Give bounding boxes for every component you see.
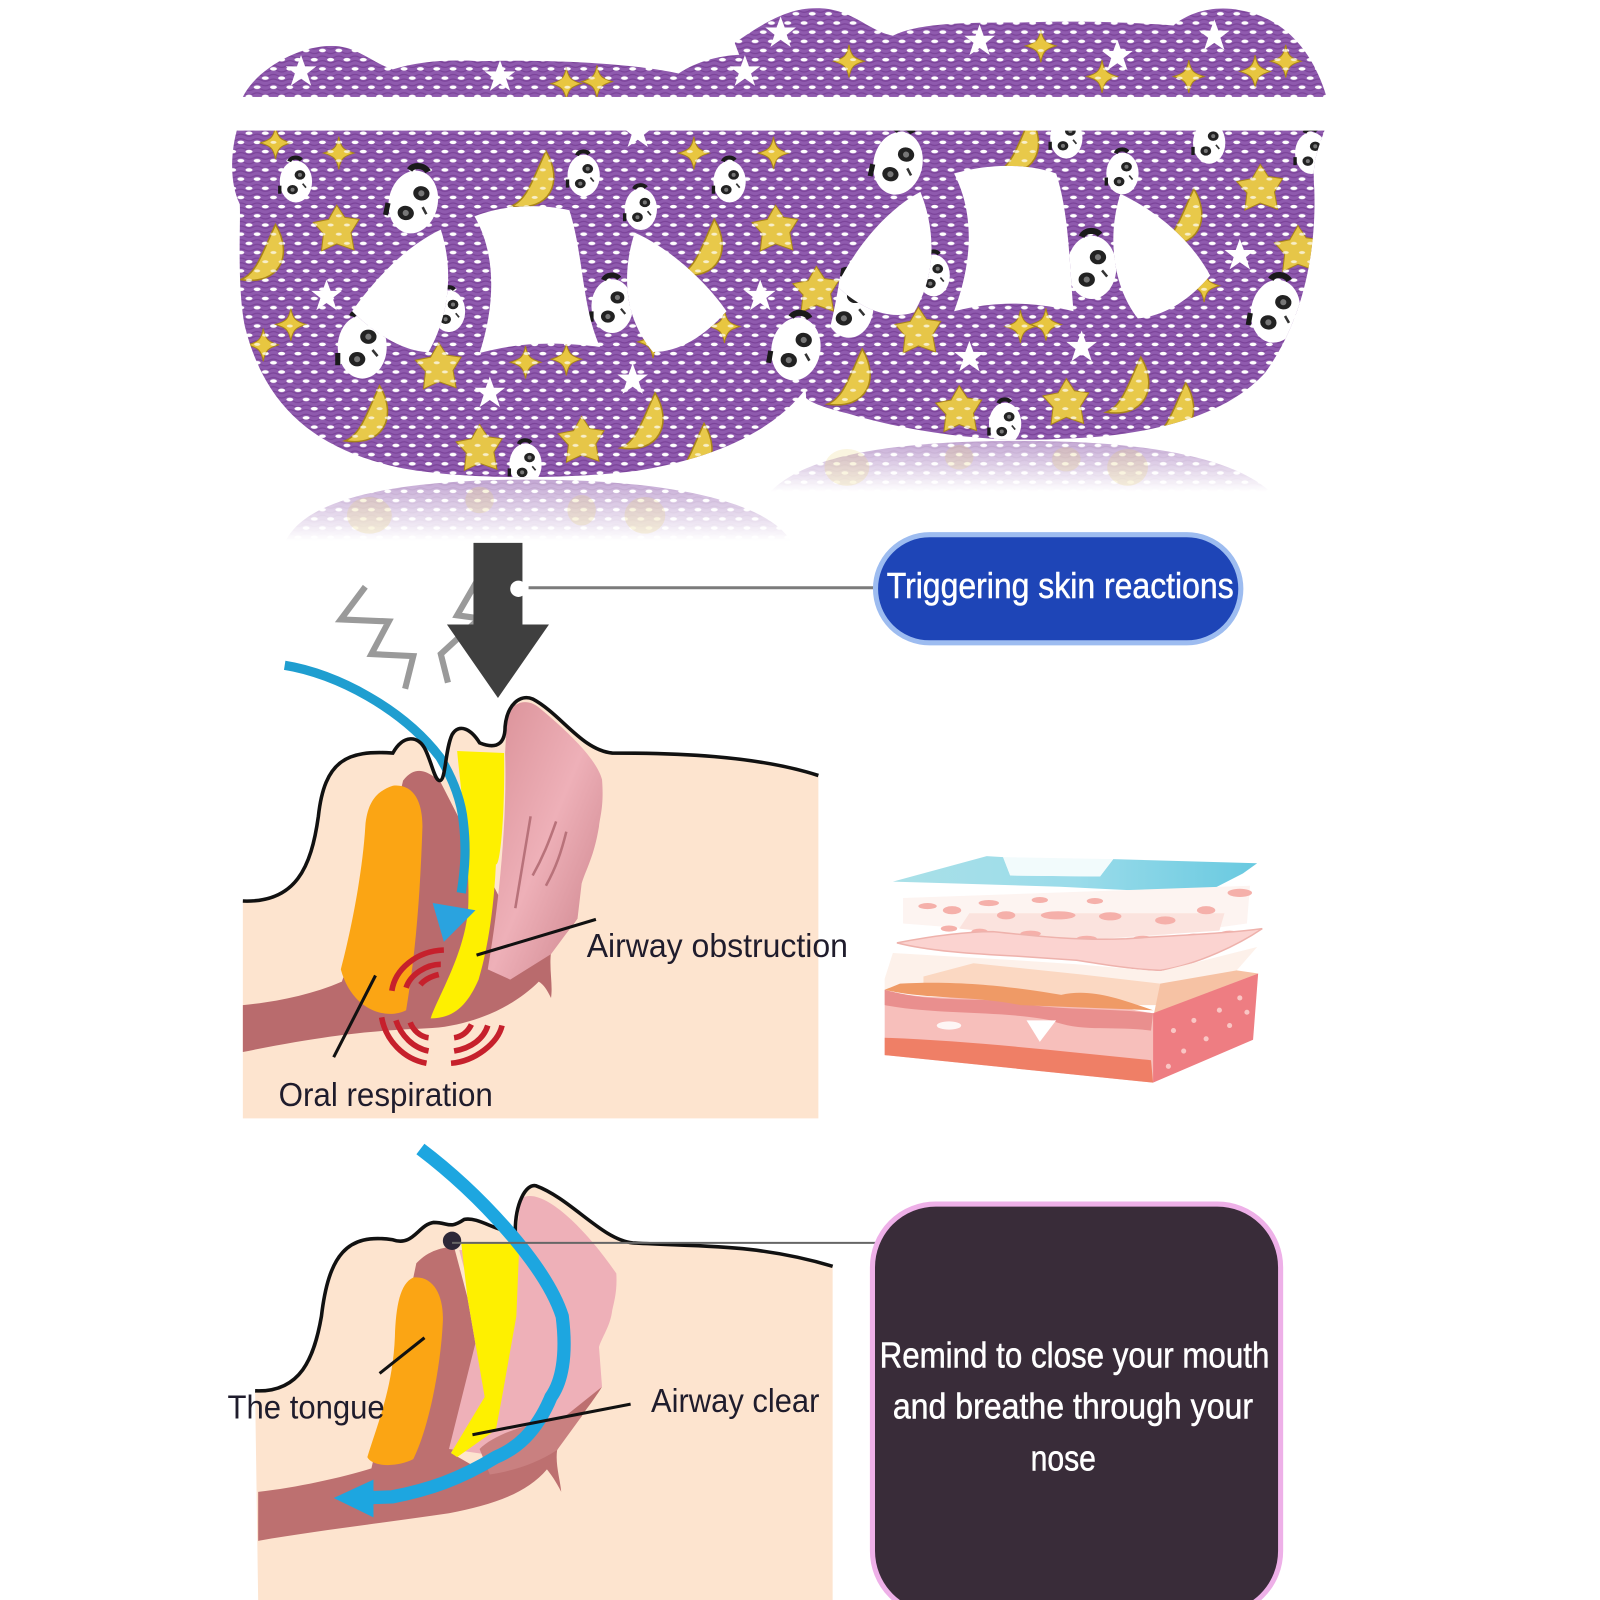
pink slab: [897, 929, 1262, 970]
nasal airway tissue: [488, 702, 603, 980]
head diagram: nasal breathing: [228, 1149, 833, 1600]
yellow airway: [431, 751, 504, 1018]
outline: [255, 1186, 833, 1391]
left purple patch: [224, 41, 857, 490]
callout: remind to close your mouth: and breathe through your: [893, 1386, 1253, 1426]
yellow airway: [451, 1243, 519, 1457]
throat tissue: [258, 1247, 602, 1541]
airflow arrow: [357, 1149, 564, 1498]
tongue: [341, 786, 422, 1014]
callout: remind to close your mouth: Remind to close your mouth: [880, 1335, 1269, 1375]
skin block front: [885, 990, 1153, 1083]
top blue layer: [893, 856, 1257, 894]
label: oral respiration: Oral respiration: [279, 1077, 493, 1114]
arrow: pressing down: [447, 543, 549, 698]
skin block right face: [1153, 973, 1258, 1083]
tongue: [367, 1277, 443, 1465]
callout: Triggering skin reactions: [529, 535, 1241, 643]
airflow arrow: [285, 665, 465, 893]
callout: remind to close your mouth: nose: [1031, 1438, 1096, 1478]
callout: Triggering skin reactions: Triggering skin reactions: [887, 566, 1234, 606]
face and neck skin: [243, 698, 818, 1118]
face and neck skin: [255, 1186, 833, 1600]
white band across patches: [224, 97, 1337, 131]
skin layers illustration: [885, 856, 1262, 1083]
red vibration arcs: [382, 950, 502, 1063]
reflection of patches: [286, 441, 1270, 541]
icon: zigzag snore lines: [341, 577, 480, 689]
callout: remind to close your mouth: [443, 1204, 1281, 1600]
outline: [243, 698, 818, 901]
head diagram: mouth breathing: [243, 665, 848, 1118]
throat tissue: [243, 771, 578, 1052]
nasal airway tissue: [449, 1196, 617, 1454]
label: the tongue: The tongue: [228, 1389, 385, 1426]
label: airway obstruction: Airway obstruction: [587, 928, 848, 965]
label: airway clear: Airway clear: [651, 1383, 819, 1420]
translucent layer: [885, 947, 1257, 1003]
dotted layer: [903, 886, 1250, 941]
leader lines: [477, 919, 596, 955]
right purple patch: [734, 8, 1326, 440]
leader lines: [380, 1338, 424, 1373]
white down arrow: [1027, 1020, 1056, 1042]
